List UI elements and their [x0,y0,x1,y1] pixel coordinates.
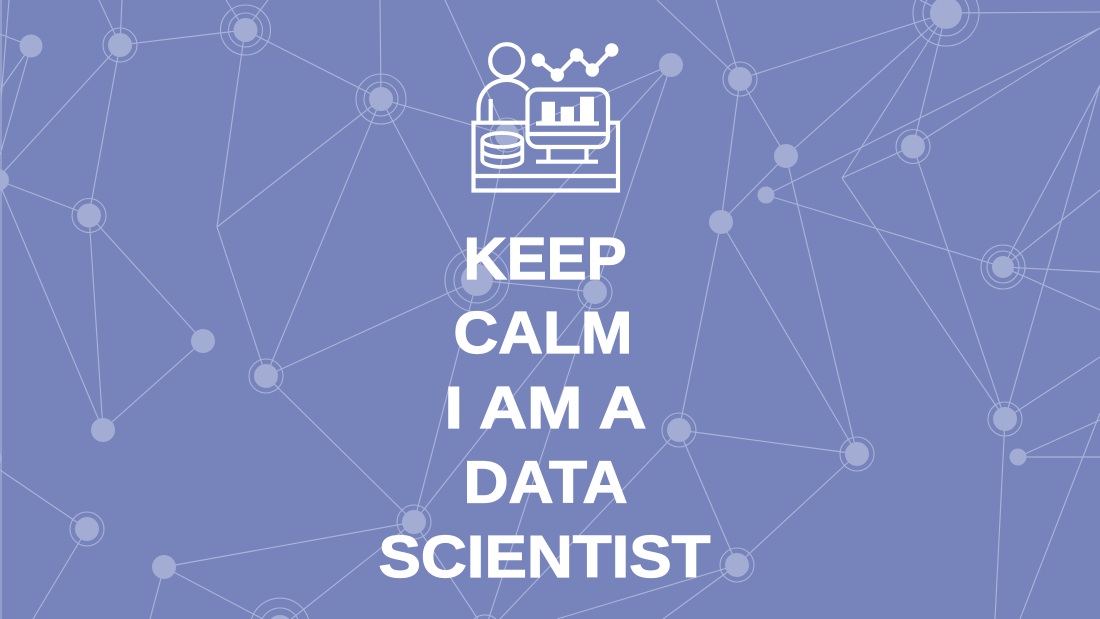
icon: database [482,133,522,167]
icon: monitor [528,90,608,162]
title: SCIENTIST [378,524,710,590]
icon: person [478,44,528,122]
title: DATA [464,449,628,515]
icon: line chart [532,43,618,82]
title: I AM A [444,375,646,441]
title: CALM [454,300,632,366]
title [378,226,710,590]
icon: data scientist at desk [474,43,618,190]
title: KEEP [464,226,626,292]
icon: desk [474,123,618,190]
icon: bar chart on monitor [536,97,599,124]
